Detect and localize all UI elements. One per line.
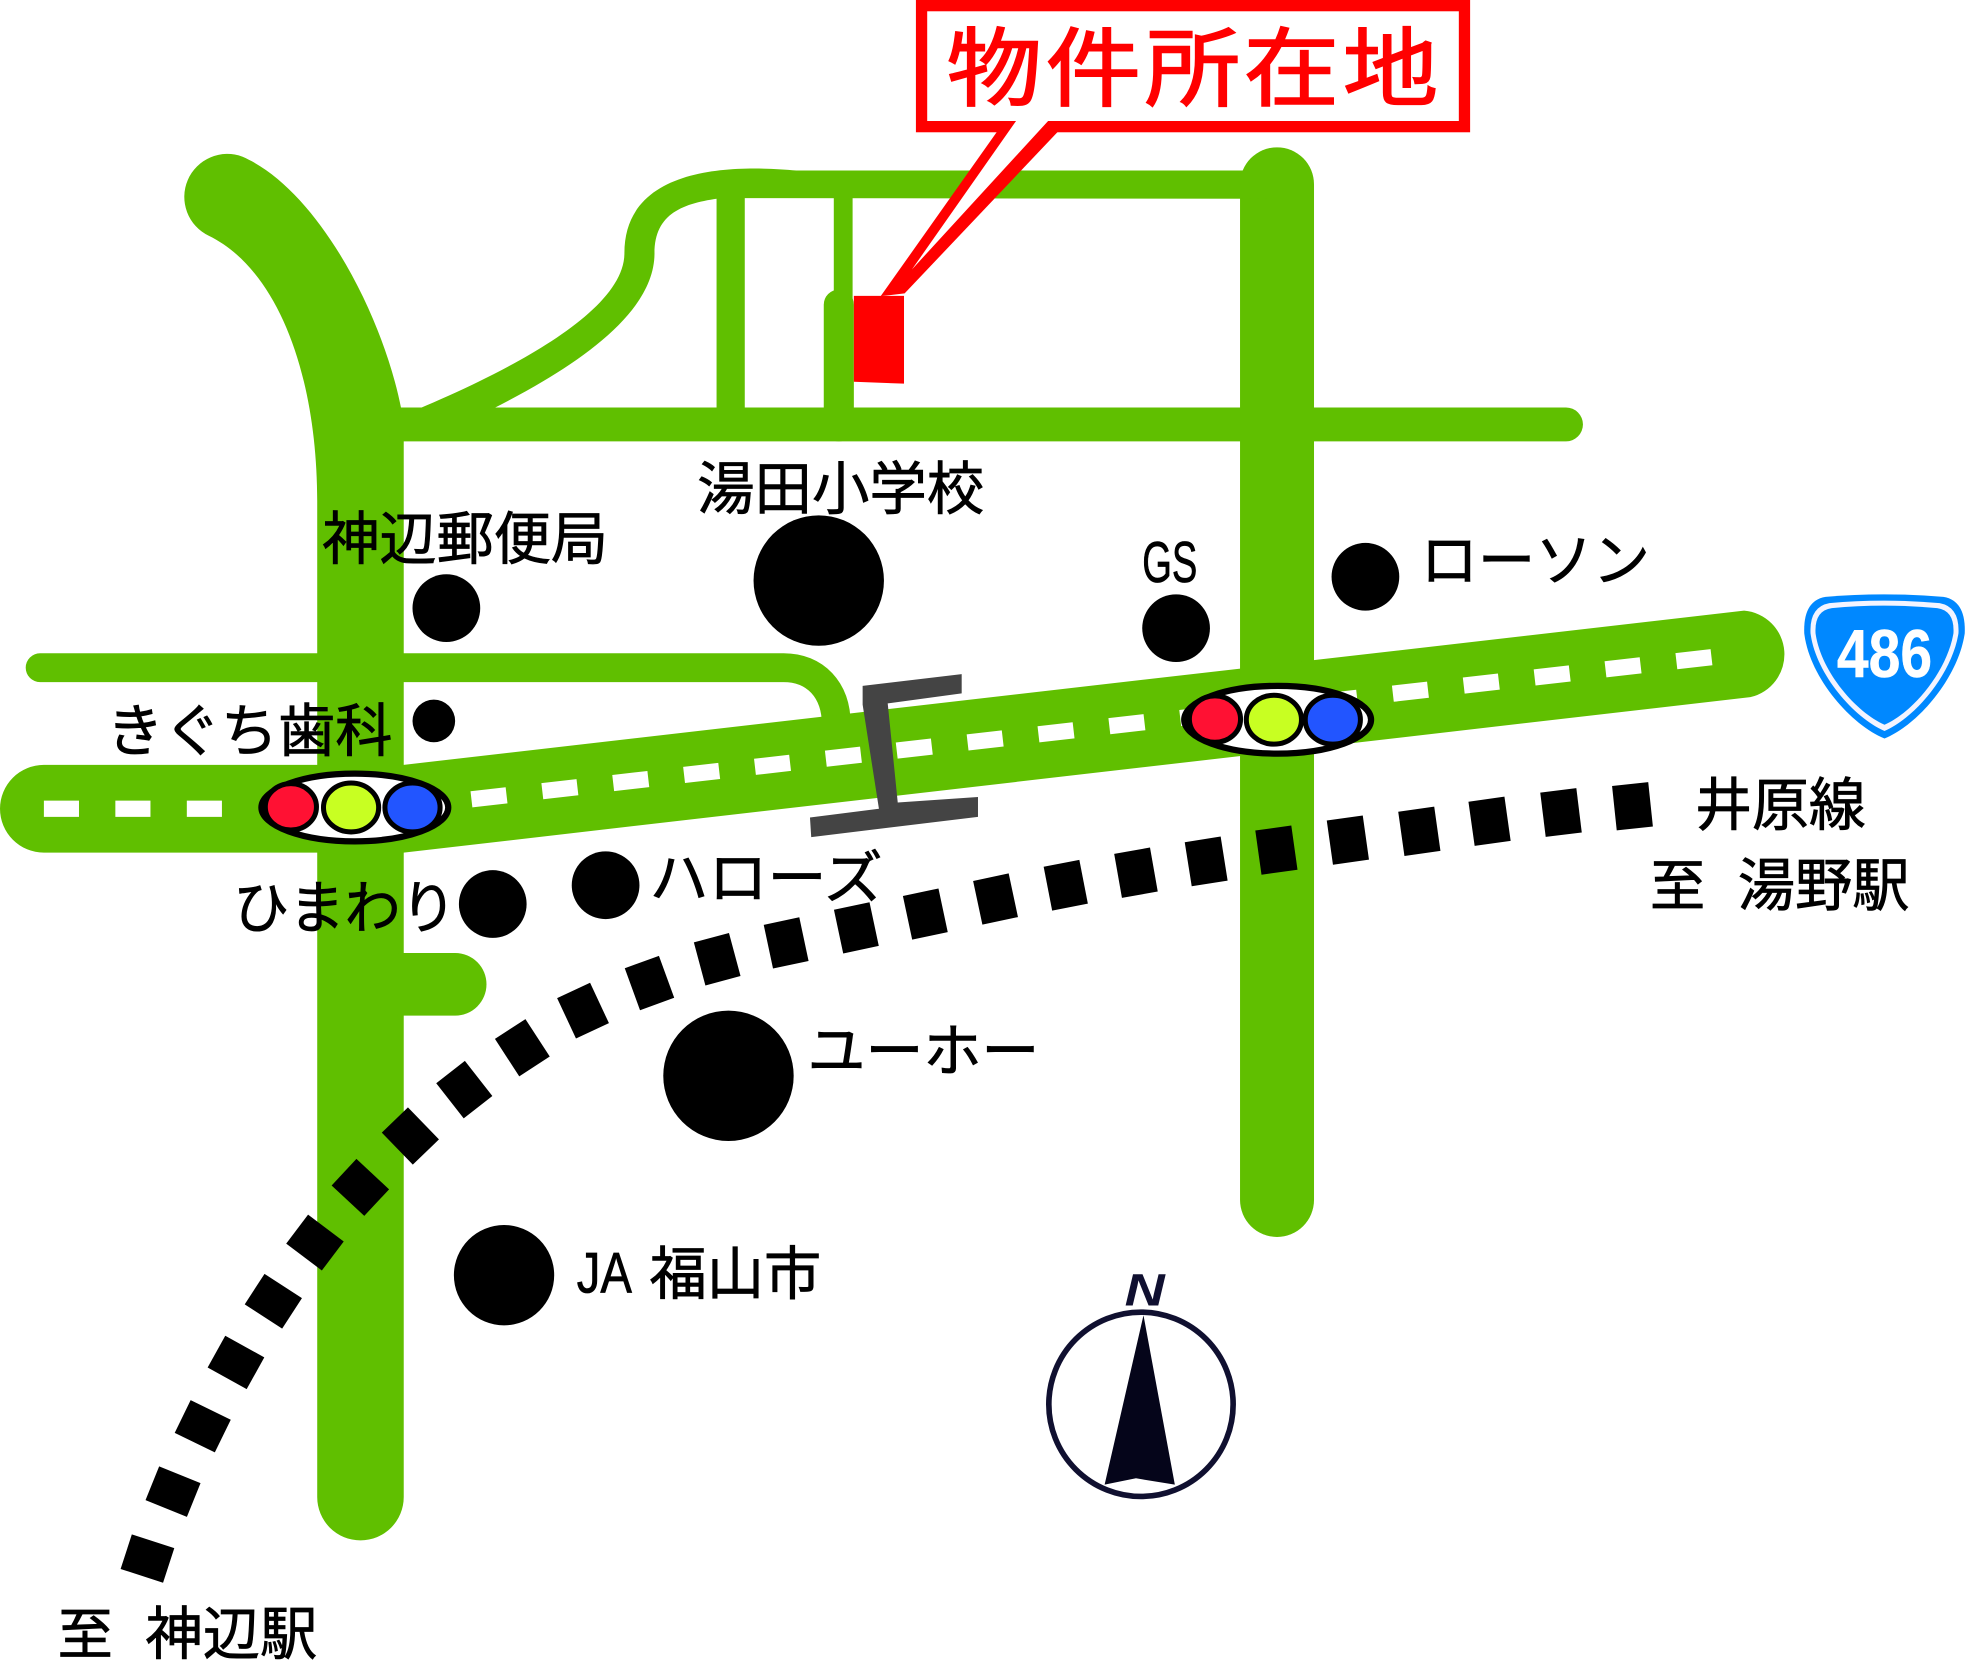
- label: Lawson: ローソン: [1421, 530, 1650, 594]
- label: Himawari: ひまわり: [233, 877, 456, 941]
- label: Yuho: ユーホー: [807, 1020, 1039, 1084]
- callout title: 物件所在地: [947, 22, 1438, 118]
- callout pointer inner gap: [912, 119, 1050, 269]
- label: JA Fukuyama: [577, 1242, 821, 1307]
- icon: traffic signal east: [1184, 686, 1371, 754]
- road: north lane: [419, 169, 1276, 409]
- landmark markers: [413, 515, 1399, 1325]
- label: to Kannabe station: [58, 1603, 317, 1662]
- label: dental clinic: きぐち歯科: [107, 700, 392, 764]
- marker: property site: [854, 296, 904, 384]
- icon: bridge: [810, 674, 978, 837]
- label: JA Fukuyama: 福山市: [649, 1243, 821, 1307]
- road: school branch road: [40, 668, 836, 725]
- label: post office: 神辺郵便局: [322, 508, 608, 572]
- label: to Yuno station: [1650, 854, 1910, 918]
- road network: [40, 154, 1566, 1540]
- label: to Yuno station: 至: [1650, 854, 1705, 917]
- label: JA Fukuyama: JA: [577, 1242, 632, 1306]
- road: middle horizontal road: [401, 411, 1566, 438]
- railway: Ibara line: [121, 782, 1653, 1583]
- compass ring: [1049, 1312, 1233, 1496]
- label: to Yuno station: 湯野駅: [1738, 854, 1910, 918]
- compass needle: [1105, 1315, 1175, 1485]
- label: Halows: ハローズ: [649, 847, 883, 911]
- road: east vertical road: [1248, 184, 1307, 1200]
- icon: north compass: [1049, 1264, 1233, 1496]
- icon: traffic signal west: [261, 774, 448, 841]
- road: route 486 main road: [0, 611, 1784, 853]
- road: lane connector two: [834, 188, 853, 307]
- label: elementary school: 湯田小学校: [697, 458, 984, 522]
- callout box: [922, 6, 1464, 127]
- road markings: [44, 657, 1713, 809]
- road: lane connector one: [717, 188, 745, 420]
- shield number: 486: [1837, 617, 1932, 692]
- road: short stub: [401, 959, 455, 1009]
- road: lane to property: [827, 305, 851, 426]
- compass north letter: N: [1125, 1264, 1167, 1315]
- icon: route 486 shield: [1804, 594, 1965, 739]
- label: gas station: GS: [1142, 531, 1197, 595]
- callout pointer: [881, 132, 1058, 296]
- callout: property location: [881, 6, 1464, 296]
- label: Ibara line: 井原線: [1695, 774, 1866, 838]
- road: west curved road: [184, 154, 404, 1540]
